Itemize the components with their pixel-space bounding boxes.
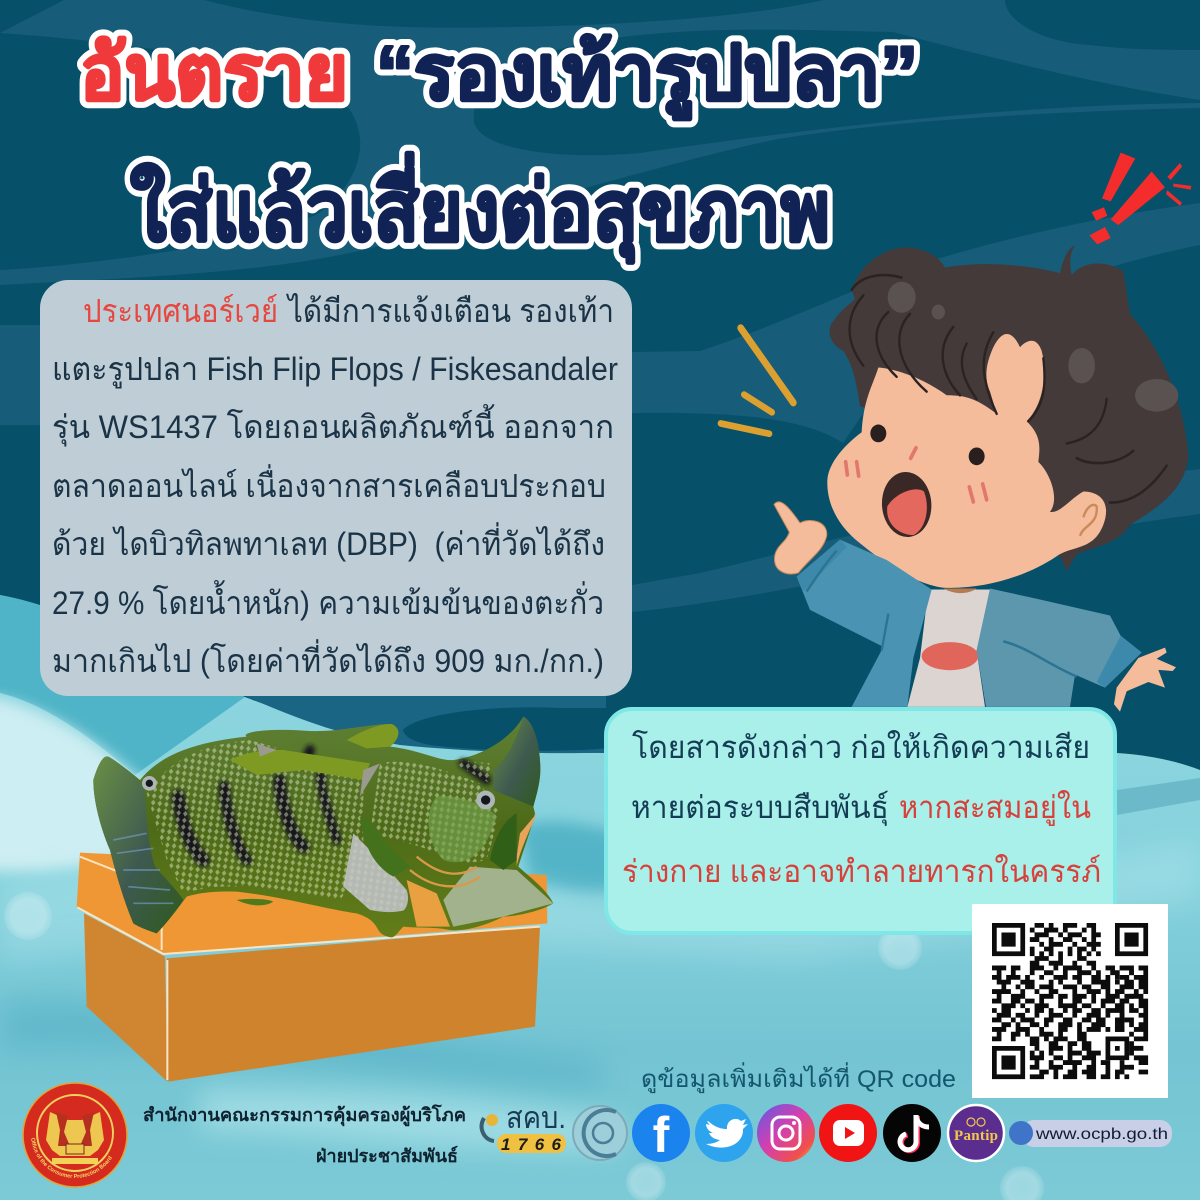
body line 5: ด้วย ไดบิวทิลพทาเลท (DBP) (ค่าที่วัดได้ถึง	[52, 522, 605, 562]
logo: pantip: Pantip	[954, 1128, 998, 1144]
body line 6: 27.9 % โดยน้ำหนัก) ความเข้มข้นของตะกั่ว	[52, 580, 604, 621]
panel: warning text	[40, 280, 632, 696]
title line 2: ใส่แล้วเสี่ยงต่อสุขภาพ	[130, 152, 830, 264]
fish dark stripes	[178, 750, 487, 860]
logo: website link	[1009, 1120, 1172, 1147]
logo: CPB	[573, 1106, 627, 1160]
QR code	[972, 904, 1168, 1098]
callout: health effects	[606, 709, 1115, 933]
boy ear	[1080, 505, 1097, 536]
fish eyes	[142, 776, 495, 809]
fish fins	[230, 724, 398, 780]
body red lead: ประเทศนอร์เวย์	[83, 293, 278, 329]
callout line 2 red: หากสะสมอยู่ใน	[899, 790, 1091, 826]
title	[80, 31, 918, 264]
title line 1 red word: อันตราย	[80, 31, 348, 116]
body line 7: มากเกินไป (โดยค่าที่วัดได้ถึง 909 มก./กก.)	[52, 639, 604, 679]
body line 3: รุ่น WS1437 โดยถอนผลิตภัณฑ์นี้ ออกจาก	[52, 404, 614, 447]
boy pointing hand	[774, 502, 827, 574]
fish sandal	[93, 717, 553, 937]
boy eyes	[870, 425, 985, 465]
boy hair	[830, 245, 1188, 571]
QR caption: ดูข้อมูลเพิ่มเติมได้ที่ QR code	[641, 1062, 956, 1094]
body line 2: แตะรูปปลา Fish Flip Flops / Fiskesandaler	[52, 351, 618, 389]
logo: pantip	[948, 1105, 1004, 1161]
organisation name	[143, 1104, 466, 1166]
title line 2: ใส่แล้วเสี่ยงต่อสุขภาพ	[130, 152, 830, 264]
boy mouth	[879, 469, 934, 540]
shoe box	[77, 853, 547, 1082]
fish scales	[147, 740, 363, 900]
fish body	[93, 717, 553, 937]
icon: red exclamation marks	[1089, 153, 1191, 244]
icon: facebook	[632, 1104, 690, 1163]
icon: tiktok	[883, 1104, 941, 1162]
illustration: surprised boy	[721, 153, 1191, 712]
logo: consumer protection board seal	[22, 1082, 128, 1188]
boy jacket	[797, 540, 1142, 707]
icon: yellow surprise lines	[721, 328, 793, 434]
illustration: shoe box with fish sandal	[77, 717, 553, 1082]
logo: hotline 1766: 1766	[501, 1135, 562, 1154]
body line 4: ตลาดออนไลน์ เนื่องจากสารเคลือบประกอบ	[52, 464, 606, 504]
body line 1: ได้มีการแจ้งเตือน รองเท้า	[285, 293, 614, 329]
logo: consumer protection board seal: Office of the Consumer Protection Board	[31, 1138, 112, 1178]
icon: twitter	[695, 1104, 753, 1162]
callout line 2: หายต่อระบบสืบพันธุ์	[631, 790, 889, 827]
fish tail right	[493, 717, 540, 807]
callout line 1: โดยสารดังกล่าว ก่อให้เกิดความเสีย	[632, 730, 1090, 765]
background: light water wave	[0, 595, 1200, 1200]
icon: instagram	[757, 1104, 815, 1162]
boy face	[827, 334, 1106, 588]
logo: website link: www.ocpb.go.th	[1035, 1126, 1168, 1143]
callout line 3 red: ร่างกาย และอาจทำลายทารกในครรภ์	[622, 854, 1101, 889]
boy blush and nose	[846, 448, 987, 502]
boy hair strands	[850, 275, 1167, 503]
boy shirt	[907, 588, 990, 707]
title line 1 red word: อันตราย	[80, 31, 348, 116]
fish belly	[343, 833, 408, 912]
fish tail left	[93, 756, 183, 933]
boy hair highlights	[888, 282, 1178, 412]
organisation line 2: ฝ่ายประชาสัมพันธ์	[316, 1145, 458, 1166]
title line 1 navy phrase: “รองเท้ารูปปลา”	[376, 31, 918, 120]
logo: hotline 1766	[482, 1102, 566, 1154]
fish gill	[360, 817, 410, 877]
boy right hand	[1114, 648, 1176, 712]
icon: youtube	[819, 1104, 877, 1162]
organisation line 1: สำนักงานคณะกรรมการคุ้มครองผู้บริโภค	[143, 1104, 466, 1127]
icon: facebook: f	[653, 1107, 670, 1163]
logo: hotline 1766: สคบ.	[506, 1102, 566, 1135]
title line 1 navy phrase: “รองเท้ารูปปลา”	[376, 31, 918, 120]
